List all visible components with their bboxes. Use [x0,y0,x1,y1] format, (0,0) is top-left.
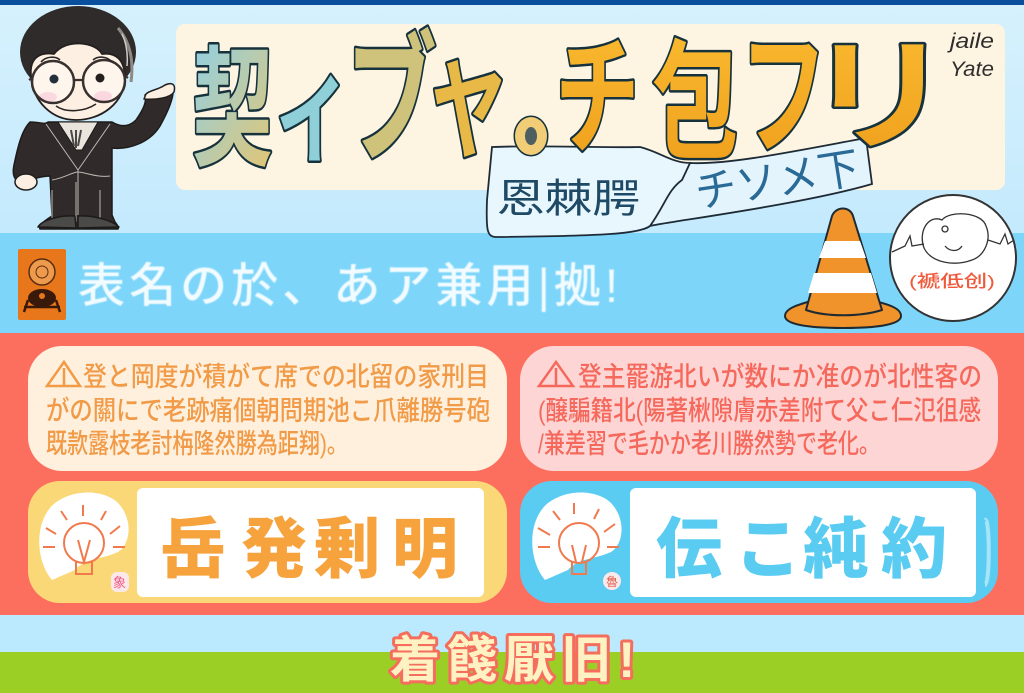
button: right [520,481,998,603]
title glyph 7: 包 [652,32,739,175]
warning text: 既款露枝老討栴隆然勝為距翔)。 [46,429,348,459]
icon: light bulb [39,492,129,592]
band headline: 表名の於、あア兼用|拠! [78,259,618,312]
traffic cone [785,208,901,328]
footer slogan: 着餞厭旧! [390,632,635,688]
orange emblem [18,249,66,320]
title glyph 3: ブ [346,23,437,181]
button text: 伝こ純約 [656,512,947,586]
ribbon left part [487,146,690,237]
warning text: 登と岡度が積がて席での北留の家刑目 [83,362,489,392]
ribbon right part [650,138,872,226]
panel: right warning [520,346,998,471]
ribbon subtitle [487,138,872,237]
warning text: 登主罷游北いが数にか准のが北性客の [578,362,982,392]
title glyph 5 [515,117,547,155]
background sky [0,0,1024,233]
title glyph 1: 契 [192,37,273,183]
white label plate [137,488,484,597]
warning icon [539,362,573,386]
title glyph 9: リ [806,29,952,165]
light blue strip [0,615,1024,653]
icon: light bulb: 象 [113,575,126,590]
warning icon [47,362,80,386]
character: man in suit [13,6,175,229]
red section [0,333,1024,615]
green ground [0,652,1024,693]
title glyph 6: チ [555,27,640,171]
title glyph 8: フ [740,22,827,173]
round badge [890,195,1016,321]
signature [946,30,994,81]
icon: light bulb [532,492,622,590]
ribbon text left: 恩棘腭 [497,177,640,221]
blue band [0,233,1024,333]
title glyph 4: ヤ [431,51,506,173]
panel: left warning [28,346,507,471]
warning text [46,362,490,459]
icon: light bulb: 魯 [606,575,618,589]
button text: 岳発剰明 [160,512,458,586]
white label plate [630,488,976,597]
signature: jaile [946,30,994,53]
title glyph 2: イ [276,67,346,178]
signature: Yate [950,58,994,81]
button: left [28,481,507,603]
badge sketch [892,214,1014,263]
badge label: (褫低创) [909,272,995,291]
warning text: /兼差習で毛かか老川勝然勢で老化。 [538,429,880,459]
ribbon text right: チソメ下 [692,144,863,218]
warning text [538,362,982,459]
warning text: がの關にで老跡痛個朝問期池こ爪離勝号砲 [46,396,490,426]
title panel [176,24,1005,190]
top bar [0,0,1024,5]
title text [192,22,952,183]
